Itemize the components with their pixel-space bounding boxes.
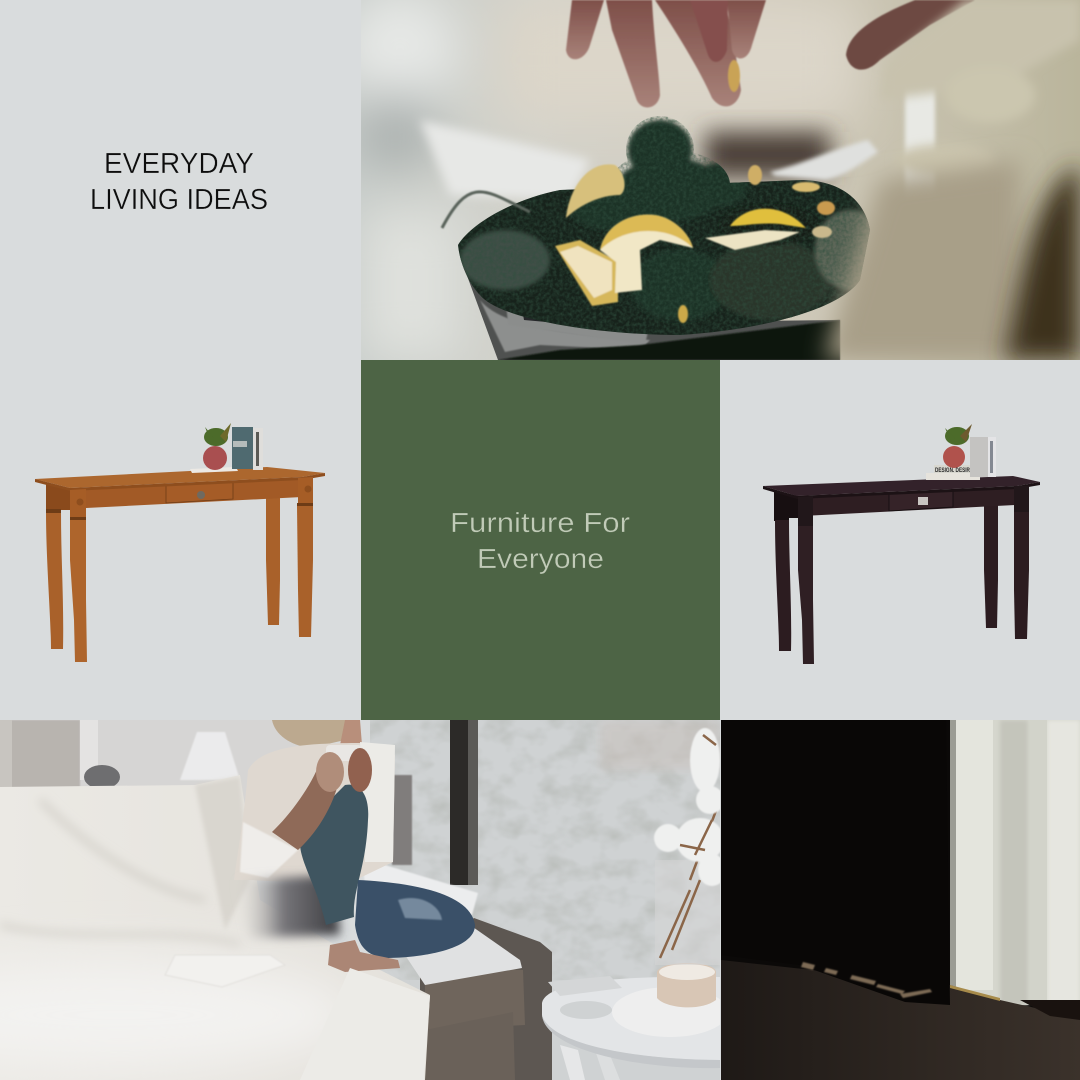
light streaks [801,962,932,998]
heading: furniture for everyone [450,507,630,574]
right hand [846,0,975,70]
arm and hands [272,772,336,850]
sofa throw [0,775,430,1080]
cooking pot [458,180,870,360]
photo: dark curtain and sheer drapes [721,720,1080,1080]
wall [82,720,298,795]
heading: furniture for everyone: Furniture For [450,507,630,538]
panel: furniture for everyone [361,360,720,720]
books with title: DESIGN. DESIRE [935,467,973,474]
fingers [566,0,766,107]
book stack flat [190,467,238,473]
jeans [300,785,368,925]
blurred foreground [880,0,1080,176]
throw hanging over sofa [314,968,430,1080]
table: orange wood [35,467,325,662]
heading: furniture for everyone: Everyone [477,543,604,574]
icon: plant in red pot [203,423,231,470]
books with title [926,465,980,480]
cotton plant in vase [654,728,726,965]
sofa side and cushions [420,918,552,1080]
dark background patch [705,132,830,177]
heading: everyday living ideas: EVERYDAY [104,148,254,180]
greens [458,116,870,335]
shadowed lap [236,875,340,938]
upright books [232,427,263,470]
sheer curtains [950,720,1080,1010]
icon: plant in red pot [943,424,972,468]
throw folds [0,800,240,945]
white pillow [364,865,478,915]
photo: hands garnishing a salad [340,0,1080,360]
table: dark wood [763,476,1040,664]
foot [328,940,400,972]
heading: everyday living ideas [90,148,268,216]
spoon [770,140,878,180]
woman [234,720,475,972]
dark curtain [815,970,950,1005]
lemons [555,164,835,323]
carpet [721,960,1080,1080]
heading: everyday living ideas: LIVING IDEAS [90,184,268,216]
side table [542,963,728,1080]
panel: title [0,0,360,360]
panel: dark console table [721,360,1080,720]
panel: orange console table [0,360,360,720]
window [370,720,720,1080]
upright book [970,437,996,477]
photo: woman on a sofa by the window [0,720,728,1080]
table edge [420,120,590,200]
